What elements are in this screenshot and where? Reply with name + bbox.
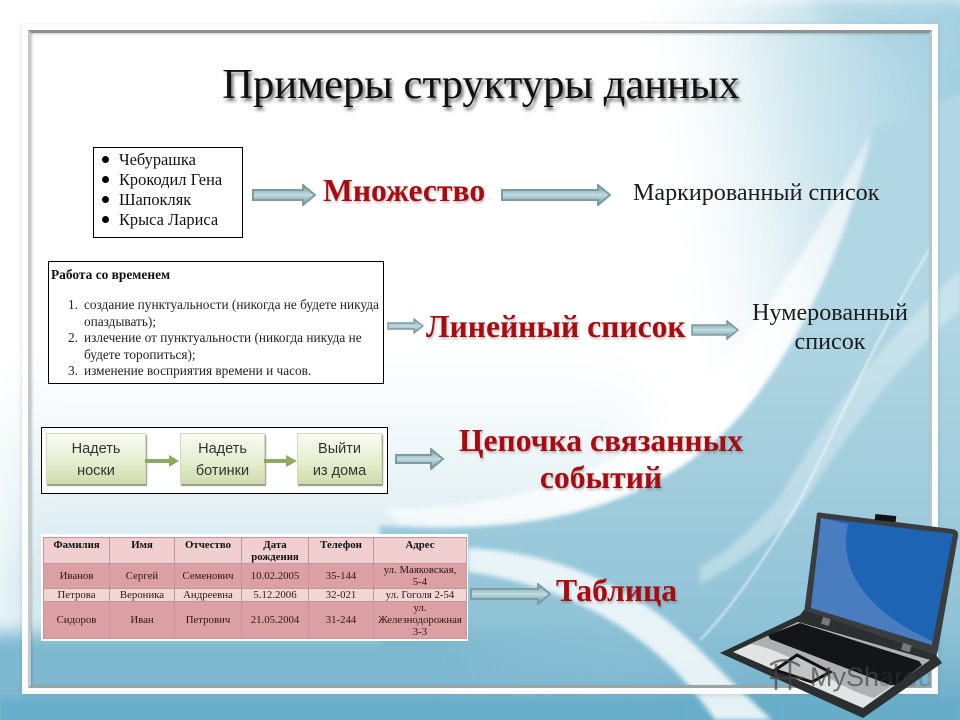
table example: 5-4 [413, 576, 427, 588]
heading: chain of related events: Цепочка связанных [459, 423, 743, 458]
table example: Семенович [182, 570, 234, 582]
table example: Иван [130, 614, 154, 626]
table example: 3-3 [413, 626, 427, 638]
node: socks [46, 433, 146, 484]
table example: Сидоров [57, 614, 96, 626]
label: numbered list: Нумерованный [752, 300, 908, 326]
node: boots [180, 433, 265, 484]
table example: Отчество [185, 539, 231, 551]
table example: 21.05.2004 [251, 614, 299, 626]
table example [41, 534, 468, 641]
arrow: chain example to chain heading [395, 448, 444, 470]
table example: ул. Маяковская, [384, 564, 456, 576]
numbered list text: создание пунктуальности (никогда не будете никуда [84, 297, 379, 312]
heading: table: Таблица [556, 573, 677, 608]
numbered list text [51, 267, 379, 378]
label: numbered list: список [795, 329, 865, 355]
numbered list text: 2. [68, 330, 78, 345]
numbered list text: изменение восприятия времени и часов. [84, 363, 311, 378]
table example: ул. [413, 602, 426, 614]
title: Примеры структуры данных [222, 61, 740, 108]
node: socks: Надеть [72, 441, 120, 457]
arrow: table example to table heading [470, 583, 551, 605]
heading: set: Множество [323, 173, 485, 208]
table example: рождения [251, 551, 299, 563]
panel: bulleted list example [93, 147, 243, 238]
bulleted list items: Чебурашка [119, 150, 196, 169]
numbered list text: 1. [68, 297, 78, 312]
table example: Фамилия [53, 539, 100, 551]
bulleted list items: Крыса Лариса [119, 210, 218, 229]
numbered list text: опаздывать); [84, 314, 156, 328]
node: leave house: из дома [313, 463, 366, 479]
arrow: socks to boots [145, 455, 179, 467]
table example: Петрович [186, 614, 230, 626]
numbered list text: будете торопиться); [84, 346, 196, 362]
table example: Сергей [126, 570, 158, 582]
table example: Телефон [320, 539, 362, 551]
watermark: MyShared [810, 662, 933, 692]
arrow: linear list to numbered list [691, 320, 739, 340]
table example: 35-144 [326, 570, 356, 582]
node: leave house: Выйти [318, 441, 361, 457]
table example: ул. Гоголя 2-54 [386, 589, 454, 601]
table example: 32-021 [326, 589, 356, 601]
icon: laptop [720, 512, 958, 718]
table example: Железнодорожная [378, 614, 462, 626]
table example: Адрес [406, 539, 434, 551]
table example: Вероника [120, 589, 164, 601]
numbered list text: 3. [68, 363, 78, 378]
arrow: list to set [252, 184, 316, 206]
node: boots: ботинки [196, 463, 249, 479]
table example: Петрова [58, 589, 95, 601]
table example: 31-244 [326, 614, 356, 626]
heading: chain of related events: событий [540, 460, 662, 495]
bulleted list items: Шапокляк [119, 190, 191, 209]
panel: flowchart example [41, 427, 388, 494]
table example: Имя [131, 539, 153, 551]
table example: 5.12.2006 [253, 589, 297, 601]
label: numbered list [752, 300, 908, 355]
heading: chain of related events [459, 423, 744, 495]
table example: Иванов [60, 570, 93, 582]
node: leave house [297, 433, 382, 484]
arrow: boots to leave [264, 455, 297, 467]
bulleted list items [102, 150, 222, 229]
panel: numbered list example [48, 261, 384, 384]
node: socks: носки [77, 463, 115, 479]
heading: linear list: Линейный список [426, 309, 686, 344]
numbered list text: Работа со временем [51, 267, 170, 282]
table example: 10.02.2005 [251, 570, 299, 582]
arrow: numbered example to linear list [387, 318, 424, 334]
table example: Андреевна [183, 589, 233, 601]
bulleted list items: Крокодил Гена [119, 170, 222, 189]
node: boots: Надеть [198, 441, 247, 457]
numbered list text: излечение от пунктуальности (никогда никуда не [84, 330, 362, 345]
label: bulleted list: Маркированный список [633, 180, 879, 206]
arrow: set to bulleted list [501, 184, 611, 206]
table example: Дата [263, 539, 287, 551]
